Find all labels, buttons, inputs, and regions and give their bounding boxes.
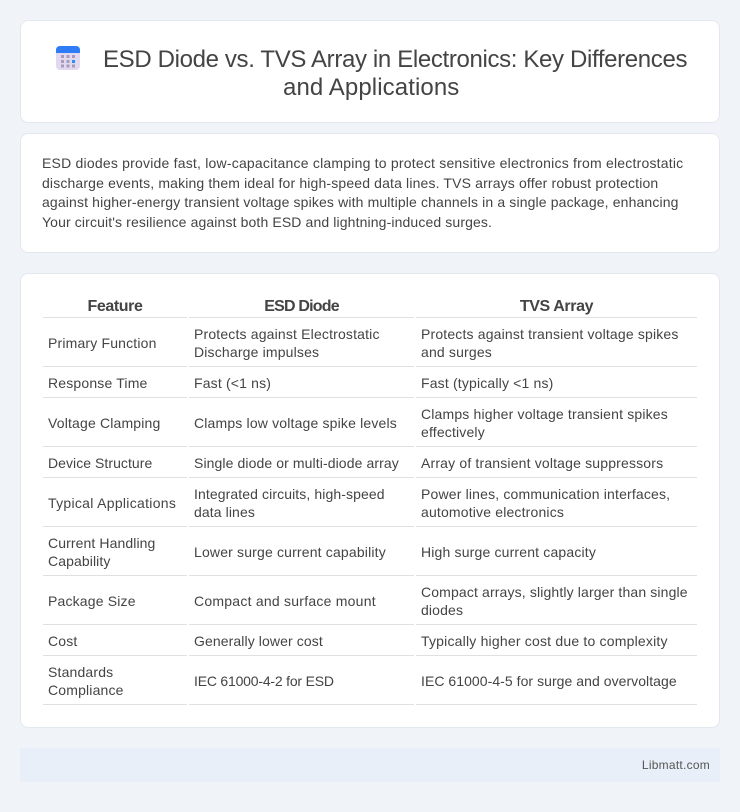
- comparison table: Compact and surface mount: [194, 593, 376, 609]
- comparison table: Protects against Electrostatic Discharge impulses: [194, 326, 380, 360]
- icon: calendar: [56, 46, 80, 70]
- comparison table: Primary Function: [48, 335, 157, 351]
- comparison table: Single diode or multi-diode array: [194, 455, 399, 471]
- comparison table: Fast (<1 ns): [194, 375, 271, 391]
- comparison table: Current Handling Capability: [48, 535, 155, 569]
- panel: introduction: [20, 133, 720, 253]
- comparison table: [43, 298, 697, 705]
- comparison table: Clamps low voltage spike levels: [194, 415, 397, 431]
- comparison table: Lower surge current capability: [194, 544, 386, 560]
- comparison table: Cost: [48, 633, 77, 649]
- comparison table: Clamps higher voltage transient spikes effectively: [421, 406, 668, 440]
- comparison table: High surge current capacity: [421, 544, 596, 560]
- comparison table: Voltage Clamping: [48, 415, 160, 431]
- comparison table: Standards Compliance: [48, 664, 124, 698]
- text block: summary: [42, 155, 683, 230]
- title: [103, 46, 687, 101]
- comparison table: Typically higher cost due to complexity: [421, 633, 668, 649]
- comparison table: Device Structure: [48, 455, 152, 471]
- comparison table: Feature: [88, 298, 142, 315]
- footer bar: Libmatt.com: [642, 758, 710, 772]
- comparison table: IEC 61000-4-2 for ESD: [194, 673, 334, 689]
- comparison table: Typical Applications: [48, 495, 176, 511]
- text block: summary: ESD diodes provide fast, low-capacitance clamping to protect sensitive electronics from electrostatic: [42, 155, 683, 171]
- comparison table: Integrated circuits, high-speed data lines: [194, 486, 385, 520]
- comparison table: Generally lower cost: [194, 633, 323, 649]
- comparison table: Package Size: [48, 593, 136, 609]
- comparison table: Response Time: [48, 375, 147, 391]
- title: ESD Diode vs. TVS Array in Electronics: Key Differences: [103, 46, 687, 73]
- comparison table: IEC 61000-4-5 for surge and overvoltage: [421, 673, 677, 689]
- comparison table: ESD Diode: [264, 298, 339, 315]
- comparison table: Compact arrays, slightly larger than single diodes: [421, 584, 688, 618]
- panel: comparison table: [20, 273, 720, 728]
- comparison table: Array of transient voltage suppressors: [421, 455, 663, 471]
- footer bar: [20, 748, 720, 782]
- title: and Applications: [283, 74, 459, 101]
- comparison table: Protects against transient voltage spikes and surges: [421, 326, 679, 360]
- text block: summary: Your circuit's resilience against both ESD and lightning-induced surges.: [42, 214, 492, 230]
- text block: summary: against higher-energy transient voltage spikes with multiple channels in a single package, enhancing: [42, 194, 679, 210]
- comparison table: Fast (typically <1 ns): [421, 375, 554, 391]
- text block: summary: discharge events, making them ideal for high-speed data lines. TVS arrays offer robust protection: [42, 174, 658, 190]
- comparison table: TVS Array: [520, 298, 593, 315]
- panel: header: [20, 20, 720, 123]
- comparison table: Power lines, communication interfaces, automotive electronics: [421, 486, 670, 520]
